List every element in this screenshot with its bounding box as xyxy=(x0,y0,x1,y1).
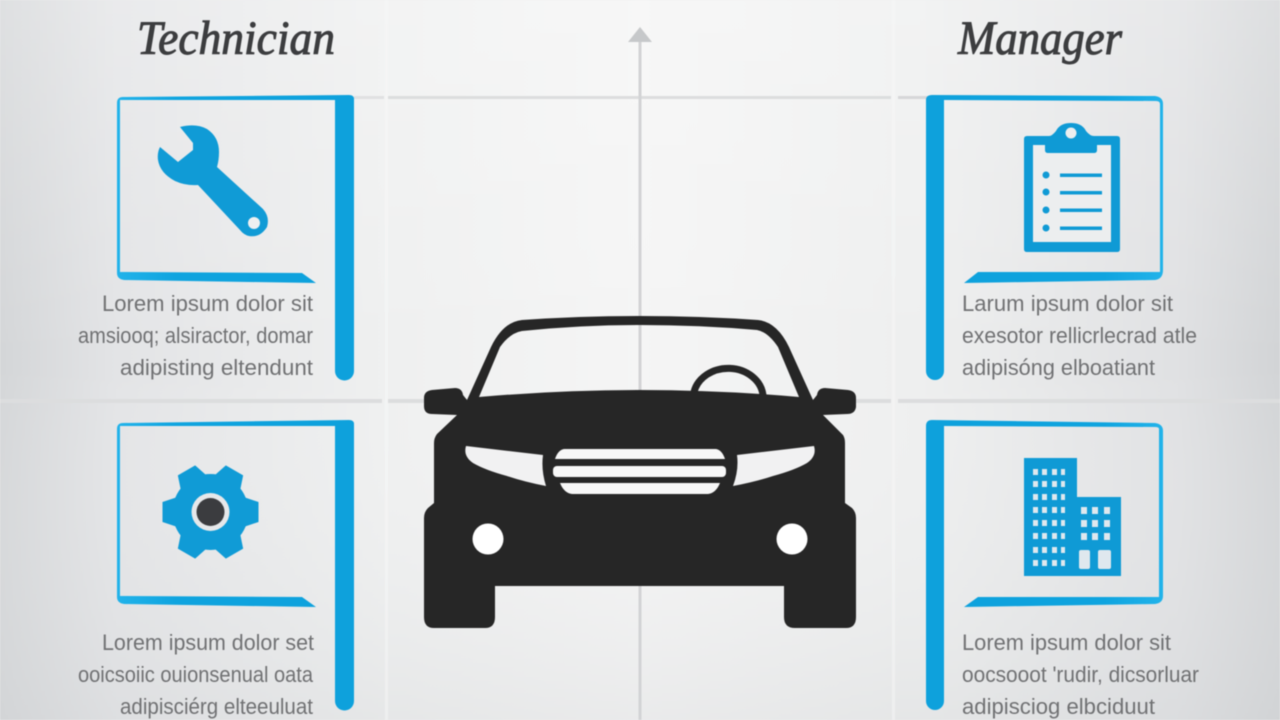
panel: technician wrench xyxy=(78,95,354,380)
text: gear description: Lorem ipsum dolor set xyxy=(102,630,314,655)
icon: gear xyxy=(162,463,258,561)
frame: clipboard panel xyxy=(926,95,1163,380)
fog lights xyxy=(472,524,808,554)
radiator grille xyxy=(553,449,726,494)
steering wheel xyxy=(694,368,763,395)
frame: gear panel xyxy=(117,420,354,710)
text: gear description xyxy=(78,630,314,719)
icon: wrench xyxy=(158,125,268,236)
text: building description: Lorem ipsum dolor sit xyxy=(962,630,1171,655)
text: building description: adipisciog elbciduut xyxy=(962,694,1155,719)
text: building description: oocsooot 'rudir, dicsorluar xyxy=(962,662,1199,687)
heading: Manager: Manager xyxy=(957,12,1122,65)
text: clipboard description: adipisóng elboatiant xyxy=(962,355,1155,380)
icon: office building xyxy=(1024,458,1121,576)
panel: technician gear xyxy=(78,420,354,719)
text: gear description: adipisciérg elteeuluat xyxy=(120,694,313,719)
frame: building panel xyxy=(926,420,1163,710)
text: wrench description: amsiooq; alsiractor, domar xyxy=(78,323,313,348)
text: wrench description xyxy=(78,291,313,380)
icon: clipboard xyxy=(1024,123,1120,252)
car body xyxy=(424,316,856,628)
heading: Technician: Technician xyxy=(137,12,335,65)
frame: wrench panel xyxy=(117,95,354,380)
left headlight xyxy=(465,446,546,486)
text: clipboard description: Larum ipsum dolor sit xyxy=(962,291,1173,316)
text: gear description: ooicsoiic ouionsenual oata xyxy=(78,662,314,687)
right headlight xyxy=(733,446,815,486)
panel: manager clipboard xyxy=(926,95,1197,380)
central axis arrow xyxy=(628,27,652,720)
text: clipboard description: exesotor rellicrlecrad atle xyxy=(962,323,1197,348)
text: clipboard description xyxy=(962,291,1197,380)
text: building description xyxy=(962,630,1199,719)
text: wrench description: adipisting eltendunt xyxy=(120,355,313,380)
car illustration xyxy=(424,316,856,628)
panel: manager building xyxy=(926,420,1199,719)
text: wrench description: Lorem ipsum dolor sit xyxy=(102,291,313,316)
